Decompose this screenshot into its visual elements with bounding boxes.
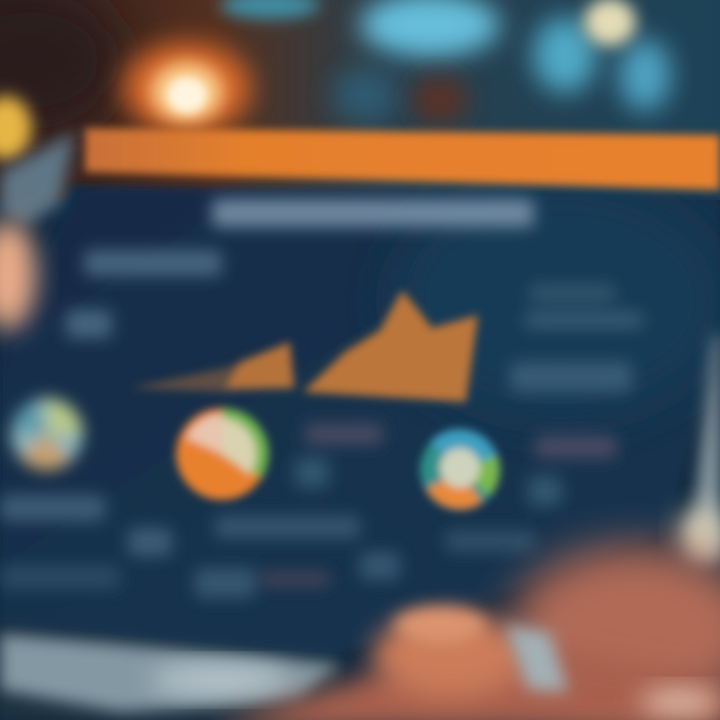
text block: right column [510,285,643,392]
panel: dashboard screen [0,180,720,655]
text block: chart captions [0,424,617,598]
icon: yellow side lamp [0,96,32,160]
hand: foreground [210,545,720,720]
icon: glowing lamp [123,42,251,134]
pie chart: left [11,398,83,470]
background: blurred room [0,0,720,200]
icon: grey shield fragment [0,132,75,330]
area chart: orange bars [130,290,478,402]
heading: blurred title [212,199,534,227]
device edge: right side [678,335,720,563]
pie chart: centre [176,408,269,500]
header bar: orange [85,128,720,190]
laptop base: light edge [0,628,340,720]
text block: blurred subtitle [66,250,222,338]
pie chart: right [420,429,500,510]
